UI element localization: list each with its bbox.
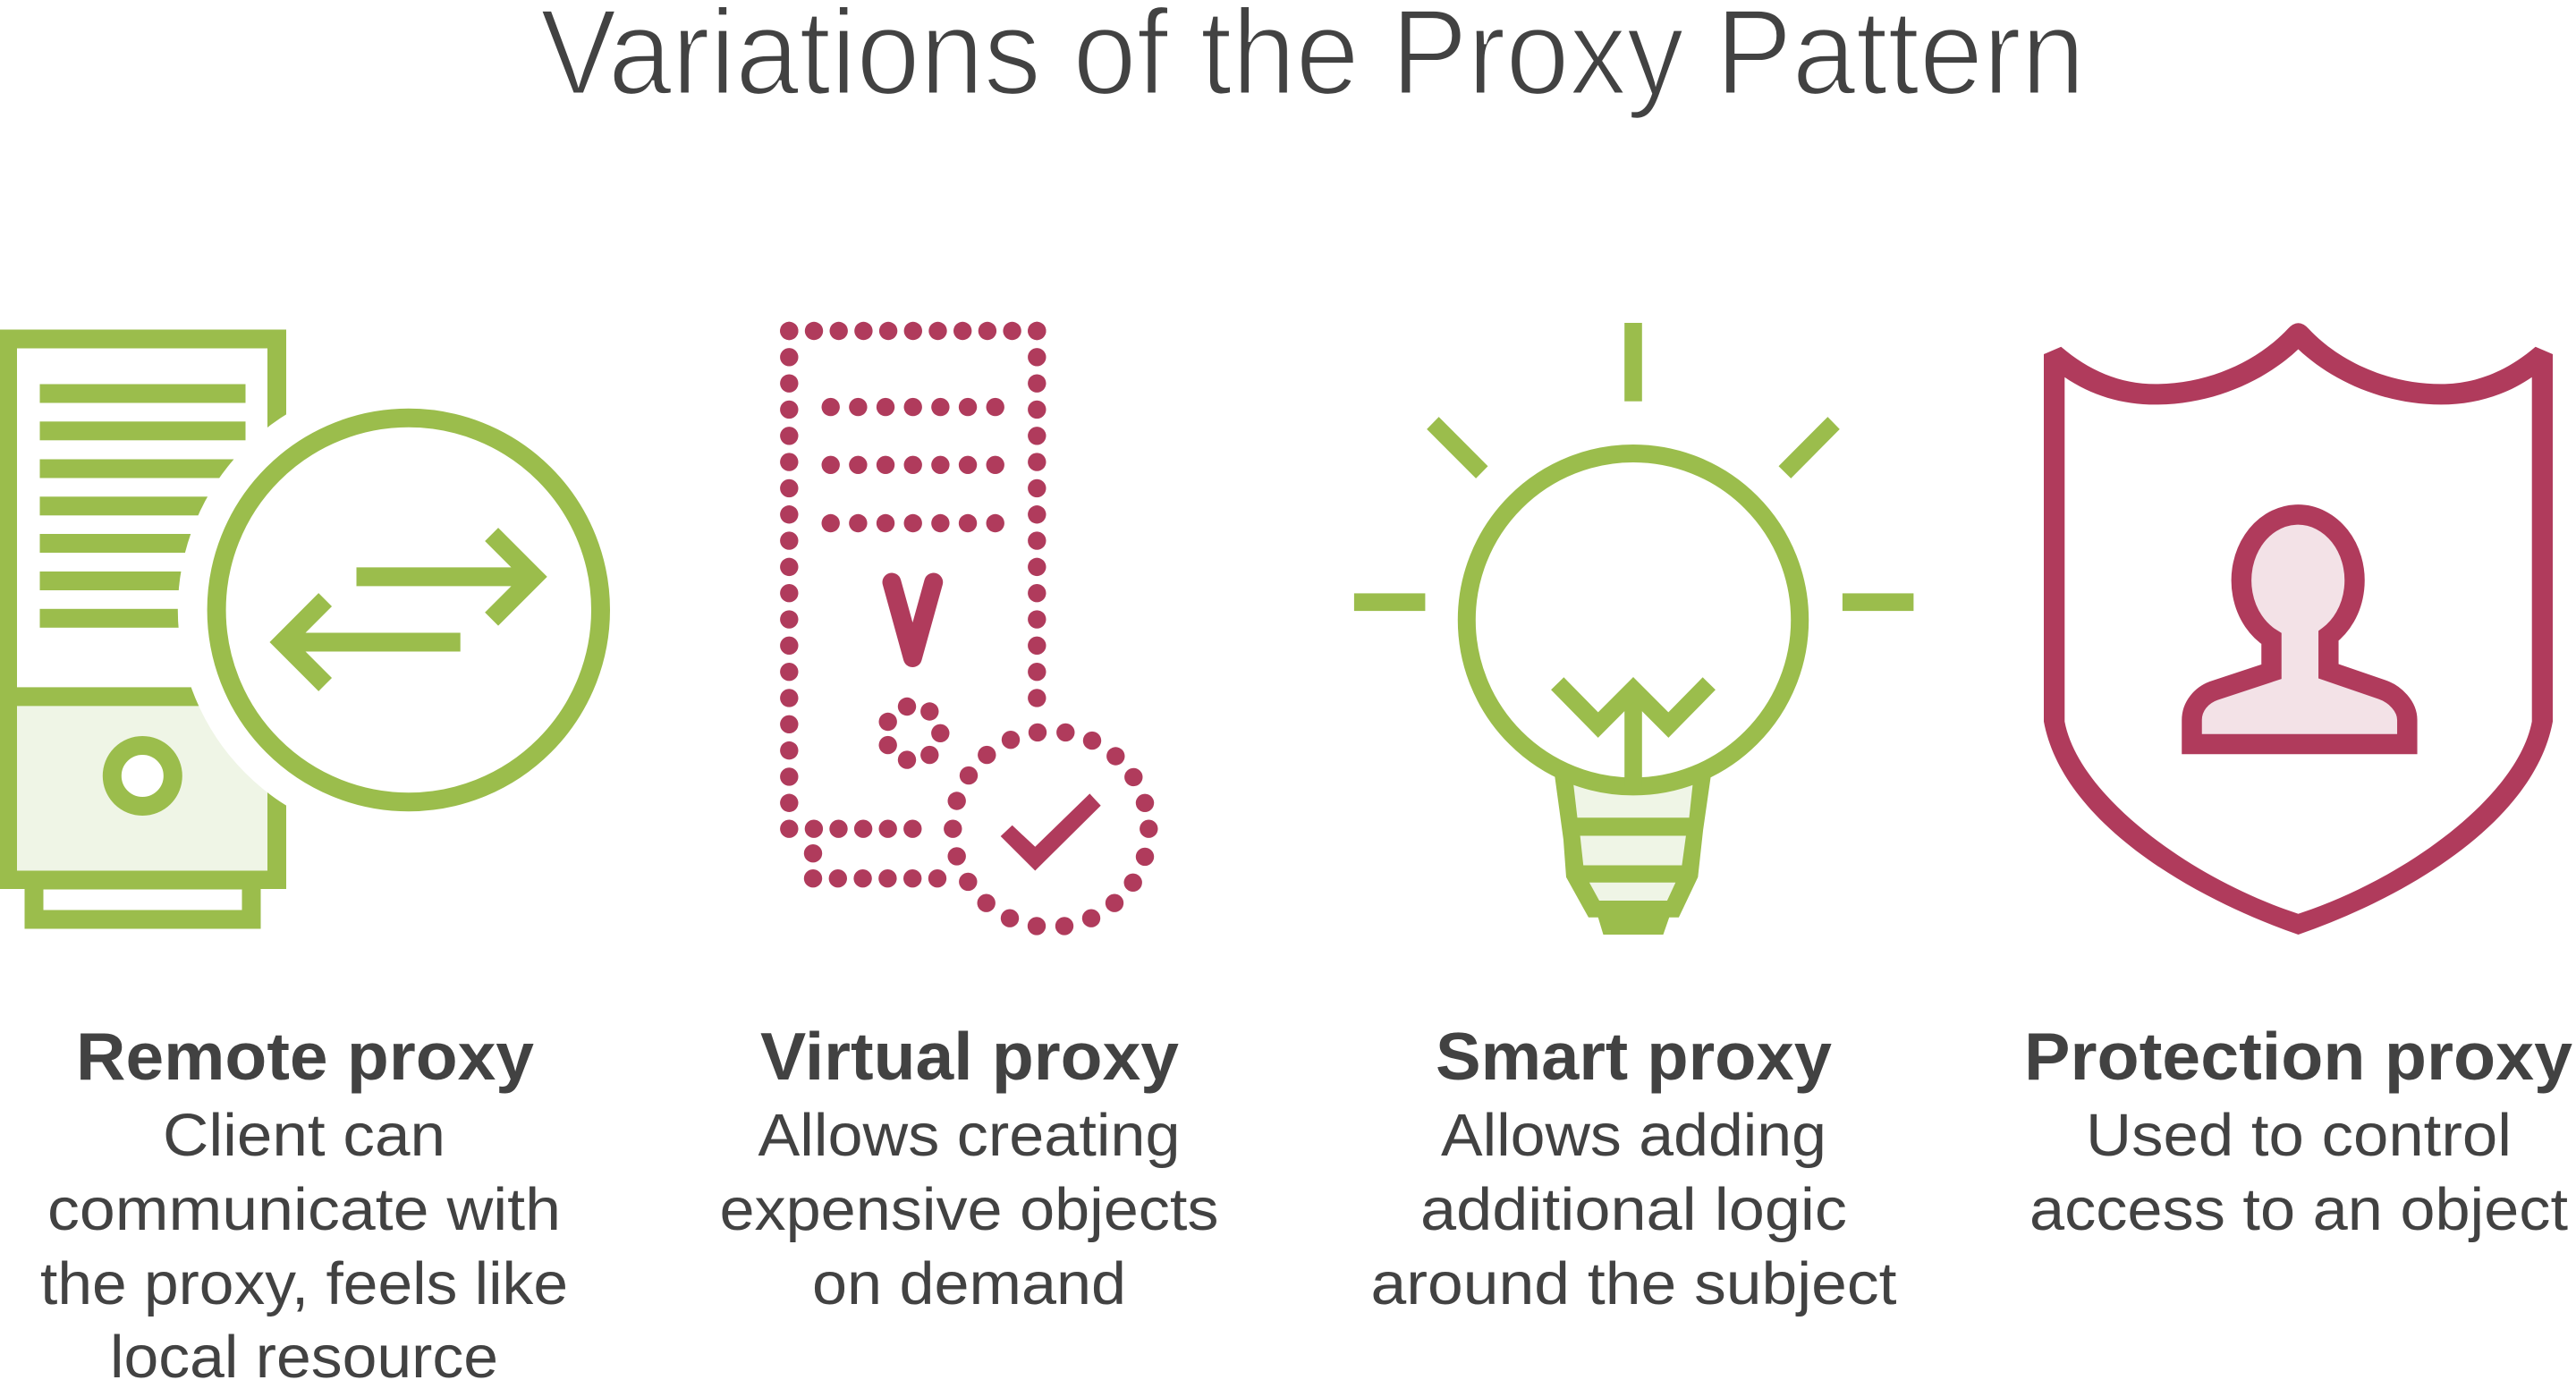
panel: remote proxy: [7, 339, 640, 1391]
description: protection proxy: access to an object: [2029, 1176, 2568, 1243]
heading: smart proxy: Smart proxy: [1436, 1019, 1832, 1094]
heading: remote proxy: Remote proxy: [76, 1019, 534, 1094]
icon: server with exchange arrows: [7, 339, 640, 919]
description: remote proxy: communicate with: [47, 1176, 561, 1243]
description: smart proxy: [1370, 1102, 1897, 1317]
heading: virtual proxy: Virtual proxy: [760, 1019, 1179, 1094]
icon: dotted server with check: [789, 331, 1158, 936]
panel: smart proxy: [1354, 323, 1913, 1317]
description: virtual proxy: Allows creating: [758, 1102, 1181, 1169]
icon: shield with person: [2044, 323, 2553, 935]
panel: protection proxy: [2024, 323, 2572, 1243]
heading: protection proxy: Protection proxy: [2024, 1019, 2572, 1094]
description: smart proxy: around the subject: [1370, 1250, 1897, 1317]
description: virtual proxy: [719, 1102, 1218, 1317]
description: protection proxy: [2029, 1102, 2568, 1243]
description: protection proxy: Used to control: [2086, 1102, 2512, 1169]
description: virtual proxy: expensive objects: [719, 1176, 1218, 1243]
icon: light bulb: [1354, 323, 1913, 935]
panel: virtual proxy: [719, 331, 1218, 1317]
description: remote proxy: the proxy, feels like: [40, 1250, 568, 1317]
description: smart proxy: additional logic: [1420, 1176, 1847, 1243]
description: remote proxy: [40, 1102, 568, 1391]
description: smart proxy: Allows adding: [1441, 1102, 1826, 1169]
description: remote proxy: local resource: [110, 1324, 498, 1391]
description: remote proxy: Client can: [163, 1102, 445, 1169]
description: virtual proxy: on demand: [812, 1250, 1126, 1317]
